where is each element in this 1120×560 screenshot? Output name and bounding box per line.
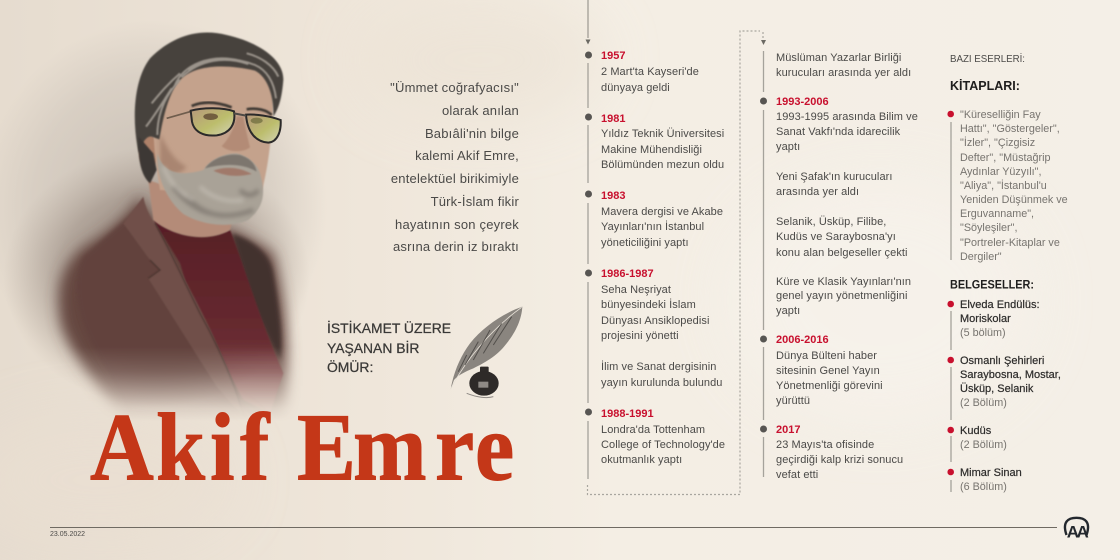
eyebrows <box>192 103 272 115</box>
ear <box>139 133 158 170</box>
books list: "Aliya", "İstanbul'u <box>960 179 1047 192</box>
entry: 1993-2006: yaptı <box>776 141 800 153</box>
entry: continued <box>776 52 911 79</box>
entry: continued: Müslüman Yazarlar Birliği <box>776 52 901 64</box>
documentary: Mimar Sinan: Mimar Sinan <box>960 467 1022 479</box>
entry: 1986-1987: İlim ve Sanat dergisinin <box>601 360 716 373</box>
entry: 2006-2016: Dünya Bülteni haber <box>776 350 877 362</box>
intro quote: "Ümmet coğrafyacısı" <box>390 80 519 95</box>
entry: 1986-1987 <box>601 268 722 389</box>
entry: 1993-2006 <box>776 96 918 317</box>
entry: 1957: dünyaya geldi <box>601 82 670 94</box>
books list: "İzler", "Çizgisiz <box>960 136 1035 149</box>
entry: 1988-1991 <box>601 408 725 466</box>
entry: 1988-1991: okutmanlık yaptı <box>601 454 682 466</box>
beard <box>157 153 263 225</box>
entry: 1957 <box>601 50 699 94</box>
intro quote: hayatının son çeyrek <box>395 217 519 232</box>
entry: 1983: 1983 <box>601 190 625 202</box>
books list: Dergiler" <box>960 251 1002 263</box>
icon: AA logo <box>1065 518 1088 542</box>
entry: 1981: Makine Mühendisliği <box>601 144 702 156</box>
entry: 1993-2006: Selanik, Üsküp, Filibe, <box>776 216 886 228</box>
entry: 2006-2016: Yönetmenliği görevini <box>776 380 883 392</box>
documentary: Elveda Endülüs <box>960 299 1040 339</box>
subtitle: ÖMÜR: <box>327 358 373 375</box>
icon: AA logo: AA <box>1067 522 1088 542</box>
documentary: Osmanlı Şehirleri <box>960 355 1061 409</box>
entry: 2017: 23 Mayıs'ta ofisinde <box>776 439 874 451</box>
documentary: Osmanlı Şehirleri: Üsküp, Selanik <box>960 383 1034 395</box>
icon: feather and inkwell <box>451 307 522 398</box>
entry: continued: kurucuları arasında yer aldı <box>776 67 911 79</box>
face <box>154 63 273 197</box>
documentary: Osmanlı Şehirleri: (2 Bölüm) <box>960 397 1007 409</box>
subtitle <box>327 319 451 375</box>
entry: 1988-1991: College of Technology'de <box>601 439 725 451</box>
neck <box>148 180 235 237</box>
documentary: Kudüs: Kudüs <box>960 425 992 437</box>
date: 23.05.2022 <box>50 531 85 538</box>
entry: 1986-1987: yayın kurulunda bulundu <box>601 377 722 389</box>
entry: 1957: 2 Mart'ta Kayseri'de <box>601 66 699 78</box>
entry: 1981: 1981 <box>601 113 625 125</box>
documentary: Osmanlı Şehirleri: Saraybosna, Mostar, <box>960 369 1061 381</box>
entry: 2006-2016: sitesinin Genel Yayın <box>776 365 880 377</box>
documentaries section <box>947 278 1061 493</box>
portrait of Akif Emre <box>8 31 304 416</box>
entry: 1988-1991: Londra'da Tottenham <box>601 424 705 436</box>
entry: 1981: Yıldız Teknik Üniversitesi <box>601 128 724 140</box>
entry: 2006-2016: yürüttü <box>776 395 810 407</box>
intro quote <box>390 80 519 254</box>
entry: 1983 <box>601 190 723 249</box>
entry: 1983: Yayınları'nın İstanbul <box>601 220 704 233</box>
entry: 1993-2006: konu alan belgeseller çekti <box>776 247 908 259</box>
entry: 1993-2006: Yeni Şafak'ın kurucuları <box>776 171 892 183</box>
entry: 1993-2006: Küre ve Klasik Yayınları'nın <box>776 276 911 288</box>
documentary: Osmanlı Şehirleri: Osmanlı Şehirleri <box>960 355 1044 367</box>
intro quote: Babıâli'nin bilge <box>425 126 519 141</box>
entry: 1986-1987: Seha Neşriyat <box>601 284 671 296</box>
books list: Aydınlar Yüzyılı", <box>960 166 1041 178</box>
timeline connector: arrows and dashed loop <box>586 0 766 494</box>
entry: 1981: Bölümünden mezun oldu <box>601 159 724 171</box>
subtitle: YAŞANAN BİR <box>327 339 419 356</box>
entry: 1957: 1957 <box>601 50 625 62</box>
entry: 1986-1987: bünyesindeki İslam <box>601 298 696 311</box>
books list: "Portreler-Kitaplar ve <box>960 237 1060 249</box>
documentary: Kudüs <box>960 425 1007 451</box>
entry: 2006-2016: 2006-2016 <box>776 334 829 346</box>
glasses <box>167 108 281 143</box>
hair grey streaks <box>146 53 278 135</box>
entry: 2017: geçirdiği kalp krizi sonucu <box>776 454 903 466</box>
documentary: Kudüs: (2 Bölüm) <box>960 439 1007 451</box>
documentary: Elveda Endülüs: Moriskolar <box>960 313 1011 325</box>
books list <box>960 109 1068 263</box>
intro quote: Türk-İslam fikir <box>431 194 519 209</box>
entry: 1993-2006: Kudüs ve Saraybosna'yı <box>776 231 896 243</box>
books list: Defter", "Müstağrip <box>960 152 1050 164</box>
hair <box>135 33 283 153</box>
entry: 2017: 2017 <box>776 424 800 436</box>
entry: 1986-1987: projesini yönetti <box>601 330 679 342</box>
documentary: Mimar Sinan: (6 Bölüm) <box>960 481 1007 493</box>
entry: 1993-2006: genel yayın yönetmenliğini <box>776 290 907 302</box>
books list: Hattı", "Göstergeler", <box>960 123 1060 135</box>
entry: 1993-2006: 1993-2006 <box>776 96 829 108</box>
subtitle: İSTİKAMET ÜZERE <box>327 319 451 336</box>
intro quote: kalemi Akif Emre, <box>415 148 519 163</box>
entry: 1993-2006: yaptı <box>776 305 800 317</box>
entry: 1986-1987: Dünyası Ansiklopedisi <box>601 315 709 327</box>
works column heading: BAZI ESERLERİ: <box>950 52 1025 65</box>
books list: "Söyleşiler", <box>960 222 1017 234</box>
intro quote: entelektüel birikimiyle <box>391 171 519 186</box>
timeline column 2 <box>760 51 918 481</box>
entry: 1993-2006: arasında yer aldı <box>776 186 859 198</box>
entry: 2017: vefat etti <box>776 469 818 481</box>
intro quote: asrına derin iz bıraktı <box>393 239 519 254</box>
entry: 2006-2016 <box>776 334 883 407</box>
books list: "Küreselliğin Fay <box>960 109 1041 121</box>
entry: 1993-2006: 1993-1995 arasında Bilim ve <box>776 111 918 123</box>
books section <box>947 78 1068 263</box>
documentary: Elveda Endülüs: (5 bölüm) <box>960 327 1006 339</box>
books heading: KİTAPLARI: <box>950 78 1020 93</box>
intro quote: olarak anılan <box>442 103 519 118</box>
jacket <box>59 197 287 427</box>
entry: 1981 <box>601 113 724 171</box>
footer rule <box>50 526 1057 528</box>
books list: Yeniden Düşünmek ve <box>960 194 1068 206</box>
lapel <box>124 196 230 382</box>
books list: Erguvanname", <box>960 208 1034 220</box>
documentary: Elveda Endülüs: Elveda Endülüs: <box>960 299 1040 311</box>
documentary: Mimar Sinan <box>960 467 1022 493</box>
entry: 2017 <box>776 424 903 481</box>
sweater <box>153 220 283 413</box>
entry: 1983: yöneticiliğini yaptı <box>601 237 689 249</box>
entry: 1988-1991: 1988-1991 <box>601 408 654 420</box>
entry: 1993-2006: Sanat Vakfı'nda idarecilik <box>776 126 901 138</box>
timeline column 1 <box>585 50 725 479</box>
documentaries heading: BELGESELLER: <box>950 278 1034 292</box>
entry: 1986-1987: 1986-1987 <box>601 268 654 280</box>
title: Akif Emre <box>90 394 514 500</box>
entry: 1983: Mavera dergisi ve Akabe <box>601 206 723 218</box>
